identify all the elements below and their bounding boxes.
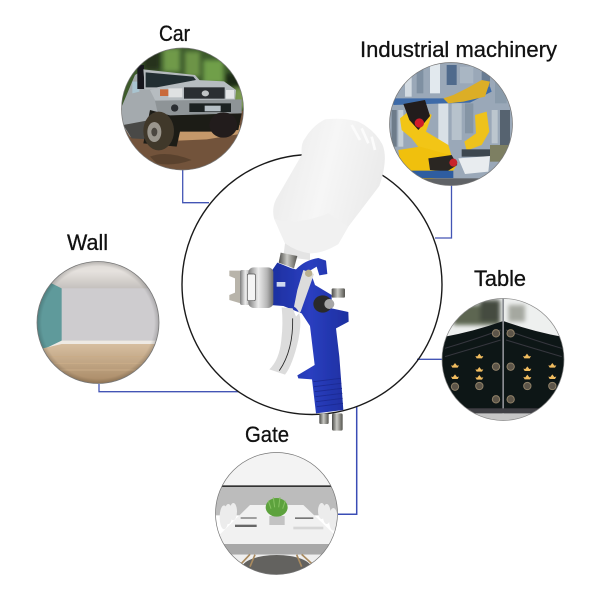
heading: Table: Table: [474, 266, 526, 291]
near robot: [400, 113, 452, 156]
photo outline: wall: [37, 262, 159, 384]
gun: grip ribs: [313, 378, 343, 407]
truck side: [122, 74, 158, 137]
photo: gate: [216, 453, 338, 574]
photo: table: [440, 297, 567, 423]
heading: Wall: Wall: [67, 230, 108, 255]
photo outline: car: [122, 48, 244, 170]
gun: trigger: [269, 270, 314, 375]
gun: cup collar: [279, 253, 297, 268]
gun: air fittings: [319, 413, 329, 424]
heading: Car: Car: [159, 21, 190, 46]
heading: Gate: Gate: [245, 422, 289, 447]
connector: gate: [338, 406, 357, 514]
cab and windscreen: [143, 69, 200, 89]
bonnet and grille: [150, 80, 236, 100]
gun: nozzle head: [229, 267, 285, 308]
gun: adjustment knob: [332, 288, 345, 298]
spray gun cup: [273, 119, 385, 260]
connector: car: [183, 170, 209, 203]
photo: car: [122, 48, 244, 170]
bumper and underbody: [155, 99, 242, 116]
spray gun body: [229, 253, 349, 431]
photo: wall: [33, 259, 162, 387]
central circle: [182, 154, 442, 414]
photo outline: industrial machinery: [390, 62, 512, 186]
connector: industrial machinery: [435, 185, 452, 238]
photo outline: gate: [216, 452, 338, 574]
gun: blue body: [270, 258, 349, 413]
photo outline: table: [442, 298, 564, 420]
photo: industrial machinery: [387, 62, 515, 188]
far robot: [443, 80, 490, 103]
connector: table: [417, 358, 442, 360]
connector: wall: [99, 384, 238, 392]
heading: Industrial machinery: Industrial machinery: [360, 37, 557, 62]
wheels: [209, 112, 237, 138]
